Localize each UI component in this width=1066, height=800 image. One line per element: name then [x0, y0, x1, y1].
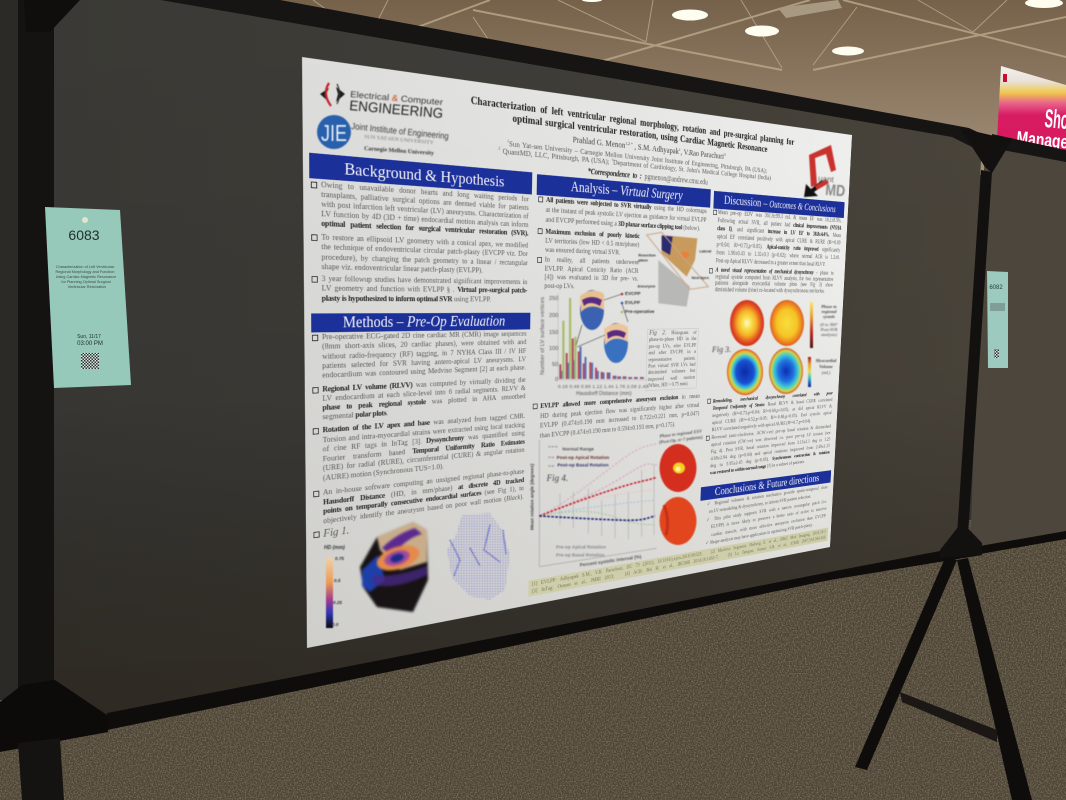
ticket 6083: Ventricular Restoration: [68, 285, 106, 289]
ECE logo: Electrical & Computer: [350, 89, 443, 107]
text: discussion 1: from 1.90±0.43 to 1.35±0.3 (p=0.02); where normal ACR is 1.2±0.: [716, 250, 840, 261]
text: analysis 2: Maximum exclusion of poorly kinetic: [545, 228, 640, 240]
text: background 1: Owing to unavailable donor hearts and long waiting periods for: [321, 181, 529, 204]
figure 4: rotation line chart: Pre-op Apical Rotation: [556, 544, 606, 549]
figure 2: histogram: Hausdorff Distance (mm): [576, 391, 632, 397]
text: discussion 4: Fig 4). Post SVR, basal rotation improved from 3.13±2.1 deg to 1.25: [711, 436, 830, 454]
poster: [302, 57, 852, 648]
text: analysis 4: HD during peak ejection flow was significantly higher after virtual: [540, 402, 700, 420]
text: analysis 4: EVLPP allowed more comprehensive aneurysm exclusion in mean: [540, 393, 700, 410]
figure 2: histogram: 200: [549, 313, 558, 319]
text: discussion 4: Reversed (anti-clockwise, ACW:+ve) pre-op basal rotation & diminished: [711, 423, 831, 440]
figure 2: histogram: 0: [555, 377, 558, 383]
figure 2: surgical clipping: plane: [638, 258, 648, 262]
figure 4: phase polar plots: [659, 428, 703, 545]
heading: Methods: [311, 313, 530, 332]
QuantMD logo: MD: [825, 182, 846, 200]
text: discussion 1: Mean pre-op EDV was 361.8±99.3 mL & mean EF was 18.2±8.9%.: [718, 209, 842, 224]
figure 3: colorbars and labels: Phase to: [821, 304, 838, 309]
figure 4: rotation line chart: Percent systolic interval (%): [579, 554, 642, 568]
figure 2 caption: diminished volumes but: [648, 367, 695, 376]
ticket 6083: Sun, 11/17: [77, 334, 101, 340]
ticket 6082: 6082: [989, 285, 1003, 291]
text: analysis 4: [532, 393, 700, 439]
text: analysis 2: LV territories (low HD < 0.5 mm/phase): [545, 237, 639, 249]
figure 1: colorbar and legend: 0.0: [332, 622, 339, 627]
figure 1: colorbar and legend: 0.75: [335, 556, 344, 561]
text: background 1: optimal patient selection for surgical ventricular restoration (SVR).: [321, 219, 528, 238]
figure 3: colorbars and labels: Myocardial: [815, 358, 837, 363]
text: methods 3: (AURE) motion (Synchronous TUS=1.0).: [323, 462, 444, 482]
text: discussion 1: Following actual SVR, all patient had clinical improvements (NYHA: [717, 218, 841, 232]
text: analysis 1: All patients were subjected to SVR virtually using the HD colormaps: [546, 196, 707, 215]
text: methods 2: [312, 376, 526, 422]
right display panel: [970, 134, 1066, 554]
figure 3: polar plots: [711, 300, 804, 395]
text: analysis 3: post-op LVs.: [544, 282, 575, 290]
text: discussion 2: regional systole computed from RLVV analysis, for two representative: [715, 274, 833, 282]
text: methods 4: Hausdorff Distance (HD, in mm/phase) at discrete 4D tracked: [323, 476, 524, 507]
text: background 1: [310, 181, 529, 238]
figure 2: LV models and legend: [576, 290, 655, 363]
figure 3: colorbars and labels: (0 to 360°: [820, 322, 838, 327]
authors and affiliations: *Correspondence to : pgmenon@andrew.cmu.edu: [588, 168, 708, 187]
ECE logo: [320, 83, 444, 121]
figure 2: LV models and legend: EVLPP: [625, 300, 640, 305]
text: analysis 1: [538, 196, 707, 232]
text: background 1: LV function by 4D (3D + time) endocardial motion analysis can inform: [321, 210, 528, 229]
JIE logo: JIE: [321, 120, 347, 146]
text: background 2: shape viz. endoventricular linear patch-plasty (EVLPP).: [321, 263, 483, 275]
text: discussion 4: was restored to within normal range [5] in a subset of patients.: [710, 458, 805, 475]
carpet: [0, 520, 1066, 800]
figure 4: rotation line chart: Pre-op Basal Rotation: [556, 553, 605, 558]
figure 2: histogram: 0.16 0.48 0.80 1.12 1.44 1.76 2.08 2.40: [558, 384, 648, 389]
text: discussion 3: Temporal Uniformity of Strain: Basal RLVV & basal CURE correlated: [712, 397, 832, 411]
poster title: optimal surgical ventricular restoration, using Cardiac Magnetic Resonance: [512, 113, 768, 154]
figure 2: histogram: [540, 293, 648, 397]
ceiling: [0, 0, 1066, 175]
text: methods 4: objectively identify the aneurysm based on poor wall motion (Black).: [323, 493, 524, 525]
JIE logo: Carnegie Mellon University: [364, 146, 434, 157]
figure 2: histogram: 250: [549, 296, 558, 302]
right post and connectors: [940, 128, 1012, 558]
figure 3: colorbars and labels: systole: [822, 314, 835, 319]
figure 2: histogram: Number of LV surface vertices: [540, 297, 546, 375]
text: background 2: To restore an ellipsoid LV geometry with a conical apex, we modified: [321, 233, 528, 250]
text: analysis 2: was ensured during virtual SVR.: [545, 246, 620, 256]
figure 2 caption: pre-op LVs, after EVLPP: [649, 342, 696, 349]
figure 3: colorbars and labels: Post-SVR: [820, 327, 838, 332]
text: analysis 1: at the instant of peak systolic LV ejection as guidance for virtual EVLPP: [546, 206, 707, 224]
text: methods 2: segmental polar plots.: [322, 409, 388, 422]
text: analysis 3: [4]) was evaluated in 3D for pre- vs.: [544, 273, 638, 283]
references band: [3] InTag: Osman et al., JMRI 2013; [4] ACR: Bei H. et al., JRCMR 2014;16:1463-7; [5] Le Tanquer, Sunuri S.R. et al., JCMR 2007;534:360-366: [532, 534, 826, 594]
QuantMD logo: [804, 145, 846, 200]
text: methods 3: (URE) for radial (RURE), circumferential (CURE) & angular rotation: [323, 446, 525, 473]
text: discussion 3: negatively (R²=0.73,p=0.04; R²=0.69,p<0.05), as did apical RLVV &: [712, 403, 832, 418]
left edge panel and post: [0, 0, 108, 800]
heading: Conclusions: Conclusions & Future directions: [715, 472, 819, 498]
text: methods 3: [312, 412, 525, 482]
figure 2 caption: improved wall motion: [648, 374, 695, 382]
figure 2: histogram: 150: [549, 330, 558, 336]
heading: Methods: Methods – Pre-Op Evaluation: [343, 314, 505, 331]
text: background 2: [311, 233, 528, 275]
figure 2 caption: [646, 328, 698, 391]
ticket 6083: 03:00 PM: [77, 341, 103, 347]
text: background 3: [312, 275, 528, 303]
figure 2: surgical clipping: New Apex: [692, 276, 709, 280]
text: analysis 3: In reality, all patients underwent: [545, 256, 639, 266]
heading: Discussion: Discussion – Outcomes & Conclusions: [724, 194, 836, 215]
figure 1: colorbar and legend: 0.5: [334, 578, 341, 583]
figure 1: heart HD surface: [360, 522, 428, 612]
text: conclusions list: ✓ Regional volumes & rotation mechanics provide spatio-temporal clues: [707, 484, 828, 507]
figure 2 caption: phase-to-phase HD in the: [649, 335, 697, 343]
references band: [1] EVLPP: Adhyapak S.M., V.R. Parachuri, IJC 75 (2011), 10.1016/j.ejcts.2010.09.025; [2] Medviso Segment: Heiberg E. et al., BMC Med Imaging, 2010;10:1: [532, 528, 826, 587]
text: discussion 2: A novel visual representation of mechanical dyssynchrony - phase to: [715, 267, 834, 276]
text: conclusions list: ELVPP) is more likely to preserve a better ratio of active to inactive: [711, 505, 827, 530]
figure 2: surgical clipping: Aneurysm: [637, 284, 656, 288]
text: analysis 4: EVLPP (0.474±0.190 mm increased to 0.722±0.221 mm, p=0.047): [540, 410, 699, 430]
text: methods 1: (8mm short-axis slices, 20 cardiac phases), were obtained with and: [322, 339, 526, 351]
text: analysis 3: EVLPP. Apical Conicity Ratio (ACR: [545, 265, 639, 274]
figure 1: colorbar and legend: HD (mm): [324, 545, 345, 551]
ticket 6083: Regional Morphology and Function: [56, 270, 114, 274]
text: methods 2: phase to peak regional systole was plotted in AHA smoothed: [322, 393, 526, 413]
text: discussion 3: Remodeling, mechanical dyssynchrony correlated with poor: [713, 390, 833, 404]
text: conclusions list: ✓ Shape analysis may have application in optimizing SVR patch-plasty.: [705, 522, 813, 546]
figure 2: surgical clipping: Lateral: [699, 249, 711, 253]
figure 2 caption: representative patient.: [648, 354, 696, 362]
JIE logo: Joint Institute of Engineering: [351, 121, 449, 141]
text: analysis 3: [537, 256, 639, 290]
text: methods 3: Torsion and intra-myocardial strains were extracted using local tracking: [323, 421, 525, 444]
ceiling trusses: [313, 0, 1066, 70]
figure 2: histogram: 50: [552, 362, 558, 368]
text: methods 2: LV endocardium at each slice-level into 6 radial segments. RLVV &: [322, 385, 526, 403]
text: methods 1: Pre-operative ECG-gated 2D cine cardiac MR (CMR) image sequences: [322, 330, 527, 342]
text: methods 3: Fourier transform based Temporal Uniformity Ratio Estimates: [323, 438, 525, 463]
text: discussion 4: apical rotation (CW:-ve) was observed i.e. poor pre-op LV torsion (see: [711, 430, 831, 447]
text: discussion 2: [709, 267, 834, 294]
text: discussion 4: deg to 5.95±2.45 deg (p<0.05). Synchronous contraction & rotation: [710, 449, 830, 468]
figure 4: rotation line chart: Mean rotation angle (degrees): [529, 463, 534, 530]
heading: Analysis: [537, 174, 711, 208]
figure 4: rotation line chart: [529, 440, 657, 568]
authors and affiliations: Prahlad G. Menon1,2 * , S.M. Adhyapak1, V.Rao Parachuri3: [573, 134, 726, 161]
text: discussion 1: [713, 209, 842, 268]
text: discussion 4: [706, 423, 831, 475]
text: discussion 1: Post-op Apical RLVV decreased to a greater extent than basal RLVV.: [716, 258, 826, 268]
text: methods 4: [313, 468, 524, 525]
figure 2: histogram: 100: [549, 346, 558, 352]
text: methods 1: patients selected for SVR having antero-apical LV aneurysms. LV: [322, 356, 526, 371]
ticket 6083: 6083: [68, 227, 100, 243]
heading: Analysis: Analysis – Virtual Surgery: [571, 179, 683, 203]
figure 1: colorbar and legend: 0.25: [333, 600, 342, 605]
text: discussion 3: [707, 390, 833, 433]
easel stand: [855, 558, 1032, 800]
ticket 6083: for Planning Optimal Surgical: [61, 280, 111, 284]
figure 2 caption: and after EVCPP, in a: [649, 348, 696, 356]
ceiling lights: [582, 0, 1063, 56]
text: background 3: 3 year followup studies have demonstrated significant improvements in: [322, 275, 527, 286]
ticket 6083: [45, 207, 131, 388]
figure 2: surgical clipping: Resection: [638, 254, 656, 258]
figure 2: LV models and legend: EVCPP: [625, 291, 641, 296]
figure 3: polar plots: Fig 3.: [711, 345, 731, 354]
figure 2: LV models and legend: Pre-operative: [625, 309, 655, 314]
figure 4: rotation line chart: Post-op Apical Rotation: [557, 455, 609, 460]
text: analysis 4: than EVCPP (0.474±0.190 mm to 0.594±0.193 mm, p=0.175).: [540, 421, 676, 439]
text: background 1: transplants, palliative surgical options are deemed viable for patients: [321, 190, 529, 212]
figure 4: phase polar plots: (Post-Op, n=7 patients): [659, 434, 703, 445]
text: methods 4: points on temporally consecutive endocardial surfaces (see Fig 1), to: [323, 485, 524, 516]
text: methods 1: without radio-frequency (RF) tagging, in 7 NYHA Class III / IV HF: [322, 347, 526, 361]
text: background 1: with post infarction left ventricular (LV) aneurysms. Characterization of: [321, 200, 529, 221]
text: methods 1: [312, 330, 527, 380]
JIE logo: SUN YAT-SEN UNIVERSITY: [364, 135, 434, 146]
text: discussion 3: RLVV correlated negatively with apical AURE (R²=0.7,p=0.04).: [712, 418, 811, 433]
text: discussion 1: p=0.04; R²=0.73,p<0.05). Apical-conicity ratio improved significantly: [716, 242, 840, 254]
poster title: Characterization of left ventricular regional morphology, rotation and pre-surgical planning for: [471, 95, 794, 147]
heading: Conclusions: [700, 470, 831, 501]
text: methods 1: endocardium was contoured using Medviso Segment [2] at each phase.: [322, 364, 526, 380]
text: conclusions list: cardiac muscle, with more effective aneurysm exclusion than EVCPP.: [711, 512, 826, 537]
authors and affiliations: 2 QuantMD, LLC, Pittsburgh, PA (USA); 3Department of Cardiology, St. John's Medical College Hospital (India): [498, 147, 771, 182]
text: discussion 2: patients alongside myocardial volume plots (see Fig 3) show: [715, 280, 833, 288]
text: conclusions list: ✓ This pilot study supports SVR with a narrow rectangular patch (i.e.: [706, 498, 827, 523]
heading: Background & Hypothesis: Background & Hypothesis: [344, 158, 504, 190]
figure 4: rotation line chart: Fig 4.: [546, 473, 568, 483]
ECE logo: ENGINEERING: [349, 97, 444, 121]
text: discussion 1: apical EF correlated positively with apical CURE & RURE (R²=0.89: [717, 234, 841, 246]
QuantMD logo: uant: [818, 174, 835, 184]
heading: Discussion: [713, 191, 845, 218]
figure 4: rotation line chart: Post-op Basal Rotation: [557, 463, 609, 468]
text: methods 3: of cine RF tags in InTag [3]. Dyssynchrony was quantified using: [323, 429, 525, 454]
text: analysis 1: and EVCPP performed using a 3D planar surface clipping tool (below).: [546, 216, 700, 232]
text: background 3: plasty is hypothesized to inform optimal SVR using EVLPP.: [322, 294, 491, 303]
figure 3: colorbars and labels: (mL): [822, 370, 831, 375]
figure 2 caption: (White, HD > 0.75 mm).: [648, 380, 688, 389]
figure 4: phase polar plots: Phase to regional ESV: [659, 428, 703, 439]
figure 1: vertex mesh: [447, 513, 510, 600]
text: discussion 3: apical CURE (R²=-0.52,p<0.05; R²=-0.86,p<0.05). End systolic apical: [712, 410, 832, 425]
figure 2 caption: Post virtual SVR LVs had: [648, 361, 696, 369]
figure 3: colorbars and labels: [808, 302, 838, 387]
figure 2 caption: Fig 2. Histogram of: [649, 329, 697, 337]
text: discussion 2: diminished volume (blue) co-located with dyssynchronous territories.: [715, 287, 825, 294]
text: discussion 4: 4.69±2.94 deg (p=0.04) and apical rotations improved from 2.49±1.25: [710, 442, 830, 461]
text: background 3: LV geometry and function with EVLPP § . Virtual pre-surgical patch-: [322, 285, 527, 295]
figure 4: rotation line chart: Normal Range: [562, 447, 594, 452]
figure 1 caption: Fig 1.: [323, 525, 349, 540]
figure 1: colorbar and legend: [324, 545, 345, 628]
text: conclusions list: on LV remodeling & dyssynchrony, to inform SVR patient selection.: [709, 493, 811, 514]
authors and affiliations: [498, 134, 771, 187]
pink conference sign: [997, 66, 1066, 155]
figure 2: surgical clipping: [637, 232, 711, 307]
authors and affiliations: 1Sun Yat-sen University – Carnegie Mellon University Joint Institute of Engineering, Pittsburgh, PA (USA);: [507, 140, 767, 175]
figure 3: colorbars and labels: analysis): [821, 332, 837, 337]
text: methods 3: Rotation of the LV apex and base was analyzed from tagged CMR.: [323, 412, 525, 435]
text: background 2: procedure), by changing the patch geometry to a linear / rectangular: [321, 253, 528, 267]
JIE logo: [317, 115, 449, 157]
ticket 6082: [987, 271, 1008, 368]
text: discussion 1: class I), and significant increase in LV EF to 38.8±4.4%. Mean: [717, 226, 841, 239]
heading: Background & Hypothesis: [309, 153, 532, 195]
text: methods 2: Regional LV volume (RLVV) was computed by virtually dividing the: [322, 376, 526, 394]
text: conclusions list: [705, 484, 828, 546]
text: methods 4: An in-house software computing an unsigned regional phase-to-phase: [323, 468, 524, 497]
text: background 2: the technique of endoventricular circular patch-plasty (EVCPP viz. Dor: [321, 243, 528, 258]
figure 3: colorbars and labels: regional: [821, 309, 837, 314]
text: analysis 2: [538, 228, 640, 256]
ticket 6083: Characterization of Left Ventricular: [56, 265, 115, 269]
figure 3: colorbars and labels: Volume: [819, 364, 833, 369]
ticket 6083: Using Cardiac Magnetic Resonance: [56, 275, 116, 279]
